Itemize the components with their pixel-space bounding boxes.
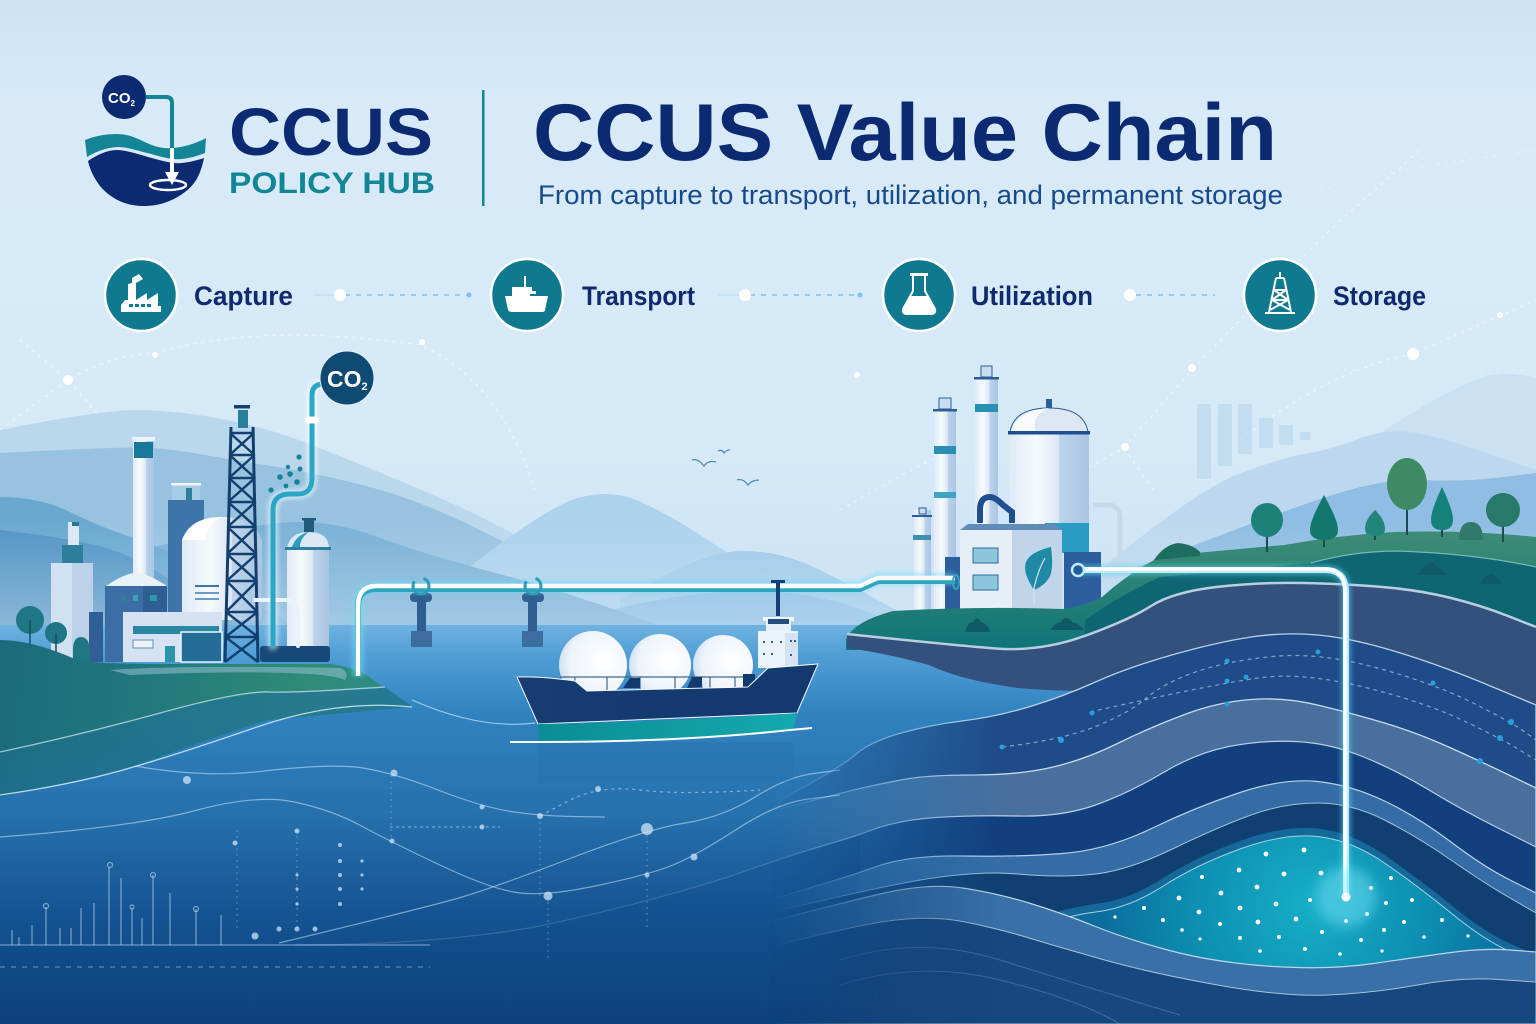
left land — [0, 640, 413, 797]
trees — [16, 606, 90, 662]
connector 3 — [1124, 289, 1215, 301]
right elbow pipes — [1093, 505, 1120, 575]
low white building — [123, 612, 222, 662]
logo subtitle: POLICY HUB — [229, 167, 435, 200]
right land — [846, 532, 1536, 650]
injection well pipe — [1072, 564, 1346, 897]
CO2 reservoir — [1000, 836, 1536, 1024]
icon: derrick — [1265, 272, 1295, 313]
dark block — [1064, 552, 1101, 610]
capture pipes — [255, 384, 322, 646]
lower strata faded to water — [700, 634, 1536, 1024]
connector 1 — [315, 289, 472, 301]
process building — [960, 524, 1062, 610]
logo mark: CO — [108, 90, 130, 107]
reflection — [538, 742, 793, 782]
step: transport — [491, 259, 695, 331]
stack two — [933, 398, 957, 610]
faint bar chart in sky — [1197, 404, 1310, 479]
right plant — [912, 366, 1120, 610]
logo mark — [85, 75, 206, 206]
trees right — [1154, 458, 1520, 560]
step: storage — [1244, 259, 1426, 331]
small stack — [912, 508, 932, 610]
horizon haze — [0, 520, 1536, 625]
left dark block — [945, 557, 960, 610]
tall building — [168, 483, 204, 615]
icon: ship — [505, 276, 548, 312]
stack three — [974, 366, 999, 528]
stratum nodes — [1000, 650, 1514, 764]
large storage tank — [1008, 399, 1090, 553]
water nodes — [183, 770, 698, 940]
CO2 dots — [268, 454, 302, 493]
stratum edge — [847, 583, 1536, 649]
small block — [89, 612, 103, 662]
logo — [85, 75, 435, 206]
CO2 badge: CO — [327, 366, 362, 392]
blue elbow — [980, 497, 1012, 523]
step: utilization: Utilization — [971, 281, 1093, 311]
reservoir particles — [1113, 848, 1470, 956]
deck rail — [560, 677, 760, 690]
derrick tower — [225, 405, 258, 662]
step: utilization — [883, 259, 1093, 331]
pipeline supports — [410, 593, 544, 647]
stratum 1 — [847, 583, 1536, 720]
step: capture: Capture — [194, 281, 293, 311]
reservoir rim — [1000, 828, 1536, 1024]
birds — [692, 450, 759, 485]
geological strata — [700, 583, 1536, 1024]
network overlay in sky — [0, 150, 1536, 510]
title: CCUS Value Chain — [533, 88, 1277, 178]
logo mark: 2 — [130, 99, 136, 108]
left plant — [16, 351, 374, 665]
step: transport: Transport — [582, 281, 695, 311]
water wave network — [0, 700, 860, 967]
base unit — [260, 646, 330, 662]
bushes — [965, 562, 1503, 632]
left building — [51, 522, 93, 665]
icon: factory — [121, 274, 161, 312]
right vessel — [285, 518, 331, 646]
deck boxes — [623, 674, 755, 688]
distant mountains — [0, 374, 1536, 650]
dome building — [105, 573, 167, 662]
logo wordmark: CCUS — [229, 95, 433, 170]
icon: flask — [903, 273, 935, 314]
chimney — [132, 437, 155, 580]
step: storage: Storage — [1333, 281, 1426, 311]
superstructure — [758, 580, 798, 668]
connector 2 — [718, 289, 862, 301]
cargo spheres — [559, 631, 753, 699]
hull — [517, 664, 818, 724]
main pipeline — [358, 575, 959, 676]
subtitle: From capture to transport, utilization, and permanent storage — [538, 180, 1283, 210]
lower strata — [700, 886, 1536, 1024]
hull boot — [538, 713, 797, 742]
big tank — [182, 517, 262, 620]
CO2 badge — [320, 351, 374, 405]
header divider — [482, 90, 484, 206]
leaf emblem — [1025, 547, 1052, 605]
waterline — [510, 728, 812, 742]
dashed strata network — [1002, 655, 1536, 760]
bottom-left data spikes — [12, 862, 221, 945]
deep water shade — [0, 835, 860, 1024]
LNG carrier ship — [510, 580, 818, 782]
well glow — [1316, 867, 1376, 927]
CO2 badge: 2 — [362, 381, 368, 393]
water — [0, 625, 1536, 1024]
step: capture — [105, 259, 293, 331]
